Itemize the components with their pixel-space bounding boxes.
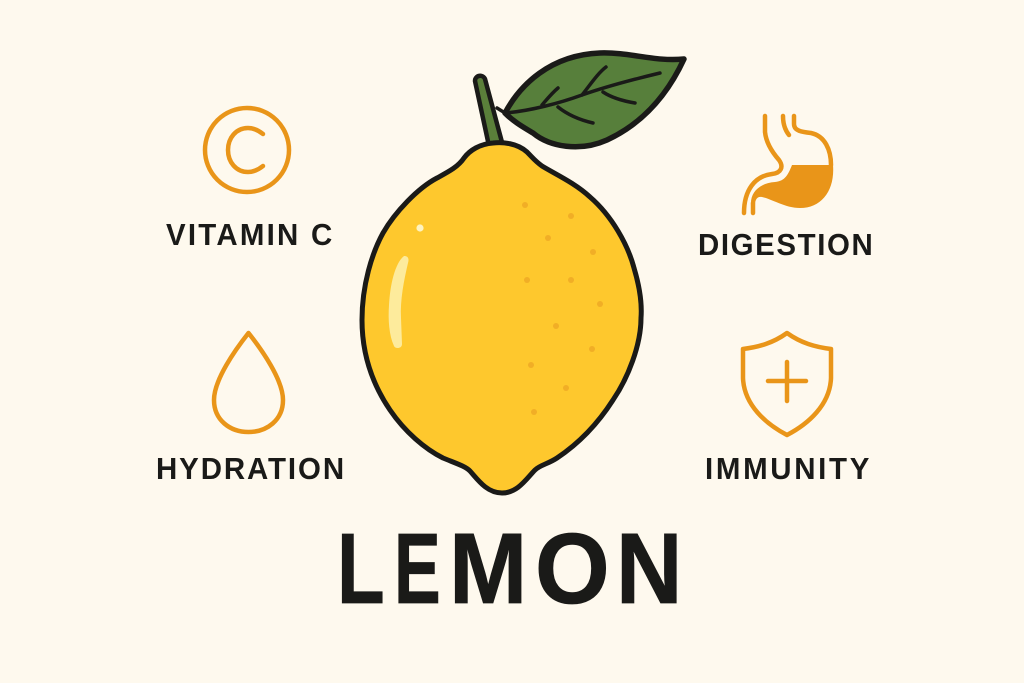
label: hydration: HYDRATION — [156, 452, 344, 486]
icon: leaf — [497, 53, 684, 147]
label: immunity: IMMUNITY — [705, 452, 869, 486]
lemon highlight — [389, 256, 409, 348]
title: L — [337, 514, 385, 625]
icon: water drop — [214, 333, 283, 432]
icon: lemon stem — [475, 76, 503, 146]
lemon glint — [416, 224, 424, 232]
title: M — [449, 512, 527, 625]
label: vitamin C: VITAMIN C — [166, 218, 332, 252]
icon: lemon body — [362, 143, 641, 493]
lemon pores — [522, 202, 603, 415]
icon: shield with plus — [743, 333, 831, 435]
label: digestion: DIGESTION — [698, 228, 873, 262]
icon: stomach — [744, 116, 833, 213]
title: O — [535, 512, 610, 624]
title: N — [616, 513, 682, 625]
icon: vitamin C — [205, 108, 289, 192]
title — [337, 512, 682, 625]
title: E — [394, 514, 441, 625]
